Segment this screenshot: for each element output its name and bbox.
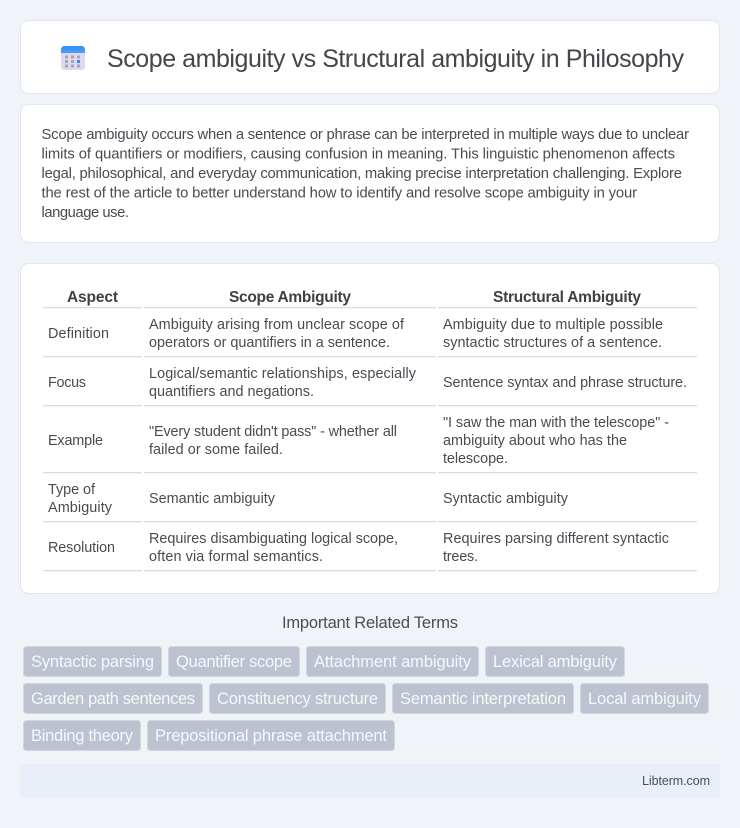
tags: related terms [24,646,708,750]
tag: Quantifier scope [176,653,292,671]
row: example: failed or some failed. [149,442,283,458]
tag [306,646,478,676]
tag: Local ambiguity [588,690,702,708]
tag: Prepositional phrase attachment [155,727,387,745]
tag: Syntactic parsing [31,653,154,671]
panel: introduction [20,104,720,242]
table header: Scope Ambiguity [229,289,351,306]
intro text: limits of quantifiers or modifiers, causing confusion in meaning. This linguistic phenomenon affects [42,146,675,162]
row: type of ambiguity: Syntactic ambiguity [443,491,569,507]
row: example [48,415,669,467]
table header [67,289,641,306]
tag [24,684,202,714]
tag [392,684,574,714]
row: focus: Sentence syntax and phrase structure. [443,375,687,391]
row: focus: quantifiers and negations. [149,384,314,400]
row: resolution: Requires disambiguating logical scope, [149,531,398,547]
row: definition: syntactic structures of a sentence. [443,335,662,351]
table header: Aspect [67,289,118,306]
row: definition [48,317,663,351]
intro text: language use. [42,205,129,221]
row: definition: Ambiguity due to multiple possible [443,317,663,333]
panel: title header [20,20,720,94]
table header: Structural Ambiguity [493,289,641,306]
row: resolution [48,531,669,565]
row: type of ambiguity: Ambiguity [48,500,113,516]
row: definition: Definition [48,326,109,342]
row: example: "Every student didn't pass" - whether all [149,424,397,440]
row: focus [48,366,687,400]
tag [148,720,394,750]
intro text [42,127,689,221]
row: resolution: Requires parsing different syntactic [443,531,669,547]
row: focus: Focus [48,375,86,391]
row: resolution: Resolution [48,540,115,556]
footer: Libterm.com [642,774,710,788]
title: Scope ambiguity vs Structural ambiguity in Philosophy [107,45,684,73]
row: definition: Ambiguity arising from unclear scope of [149,317,405,333]
tag: Attachment ambiguity [314,653,472,671]
tag [24,720,140,750]
tag [580,684,708,714]
row: example: "I saw the man with the telescope" - [443,415,669,431]
tag: Binding theory [31,727,134,745]
tag [486,646,624,676]
row: focus: Logical/semantic relationships, especially [149,366,417,382]
panel: comparison table [20,264,720,594]
tag: Semantic interpretation [400,690,566,708]
row: type of ambiguity: Semantic ambiguity [149,491,276,507]
row: type of ambiguity: Type of [48,482,96,498]
footer [20,764,720,798]
intro text: legal, philosophical, and everyday communication, making precise interpretation challenging. Explore [42,166,682,182]
heading: related terms: Important Related Terms [282,614,458,632]
tag [210,684,386,714]
intro text: the rest of the article to better understand how to identify and resolve scope ambiguity in your [42,186,637,202]
tag [24,646,162,676]
tag: Garden path sentences [31,690,195,708]
intro text: Scope ambiguity occurs when a sentence or phrase can be interpreted in multiple ways due to unclear [42,127,689,143]
row: type of ambiguity [48,482,569,516]
row: example: telescope. [443,451,508,467]
row: definition: operators or quantifiers in a sentence. [149,335,390,351]
row: example: ambiguity about who has the [443,433,627,449]
tag [168,646,300,676]
row: resolution: trees. [443,549,478,565]
tag: Lexical ambiguity [493,653,618,671]
tag: Constituency structure [217,690,378,708]
row: resolution: often via formal semantics. [149,549,323,565]
row: example: Example [48,433,103,449]
icon: calendar [61,46,85,70]
